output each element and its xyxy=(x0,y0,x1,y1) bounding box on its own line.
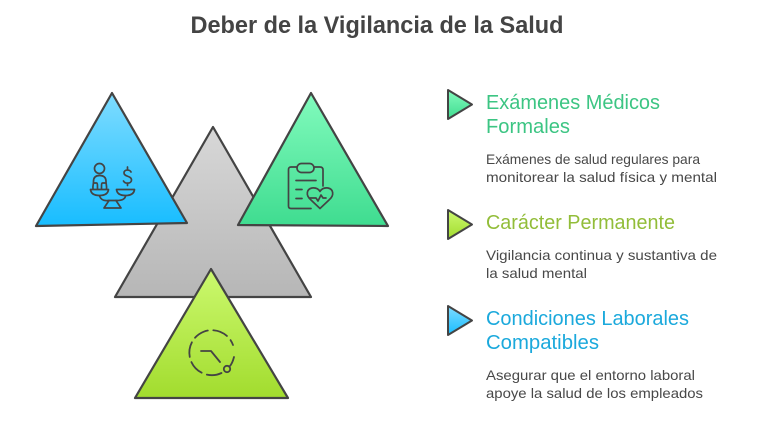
text: Carácter description: Vigilancia continua y sustantiva de xyxy=(486,247,717,263)
text: Exámenes description: Exámenes de salud regulares para xyxy=(486,151,700,167)
heading: Condiciones Laborales Compatibles xyxy=(486,308,689,354)
heading: Carácter Permanente: Carácter Permanente xyxy=(486,212,675,234)
triangle: green xyxy=(238,93,388,226)
text: Exámenes description: monitorear la salud física y mental xyxy=(486,169,717,185)
heading: Exámenes Médicos Formales: Exámenes Médicos xyxy=(486,92,660,114)
title: Deber de la Vigilancia de la Salud xyxy=(190,12,564,39)
triangle: blue xyxy=(36,93,187,226)
text: Condiciones description: Asegurar que el entorno laboral xyxy=(486,367,695,383)
heading: Condiciones Laborales Compatibles: Compatibles xyxy=(486,332,599,354)
text: Carácter description xyxy=(486,247,717,281)
text: Exámenes description xyxy=(486,151,717,185)
heading: Exámenes Médicos Formales xyxy=(486,92,660,138)
marker: lime xyxy=(448,210,472,239)
text: Carácter description: la salud mental xyxy=(486,265,587,281)
icon: clipboard with heart xyxy=(288,164,333,208)
text: Condiciones description: apoye la salud de los empleados xyxy=(486,385,703,401)
triangle: lime xyxy=(135,269,288,398)
triangle: gray center xyxy=(115,127,311,297)
text: Condiciones description xyxy=(486,367,703,401)
heading: Condiciones Laborales Compatibles: Condiciones Laborales xyxy=(486,308,689,330)
icon: dashed clock xyxy=(189,330,234,375)
icon: person and money on scale xyxy=(90,164,134,208)
marker: blue xyxy=(448,306,472,335)
heading: Exámenes Médicos Formales: Formales xyxy=(486,116,570,138)
marker: green xyxy=(448,90,472,119)
